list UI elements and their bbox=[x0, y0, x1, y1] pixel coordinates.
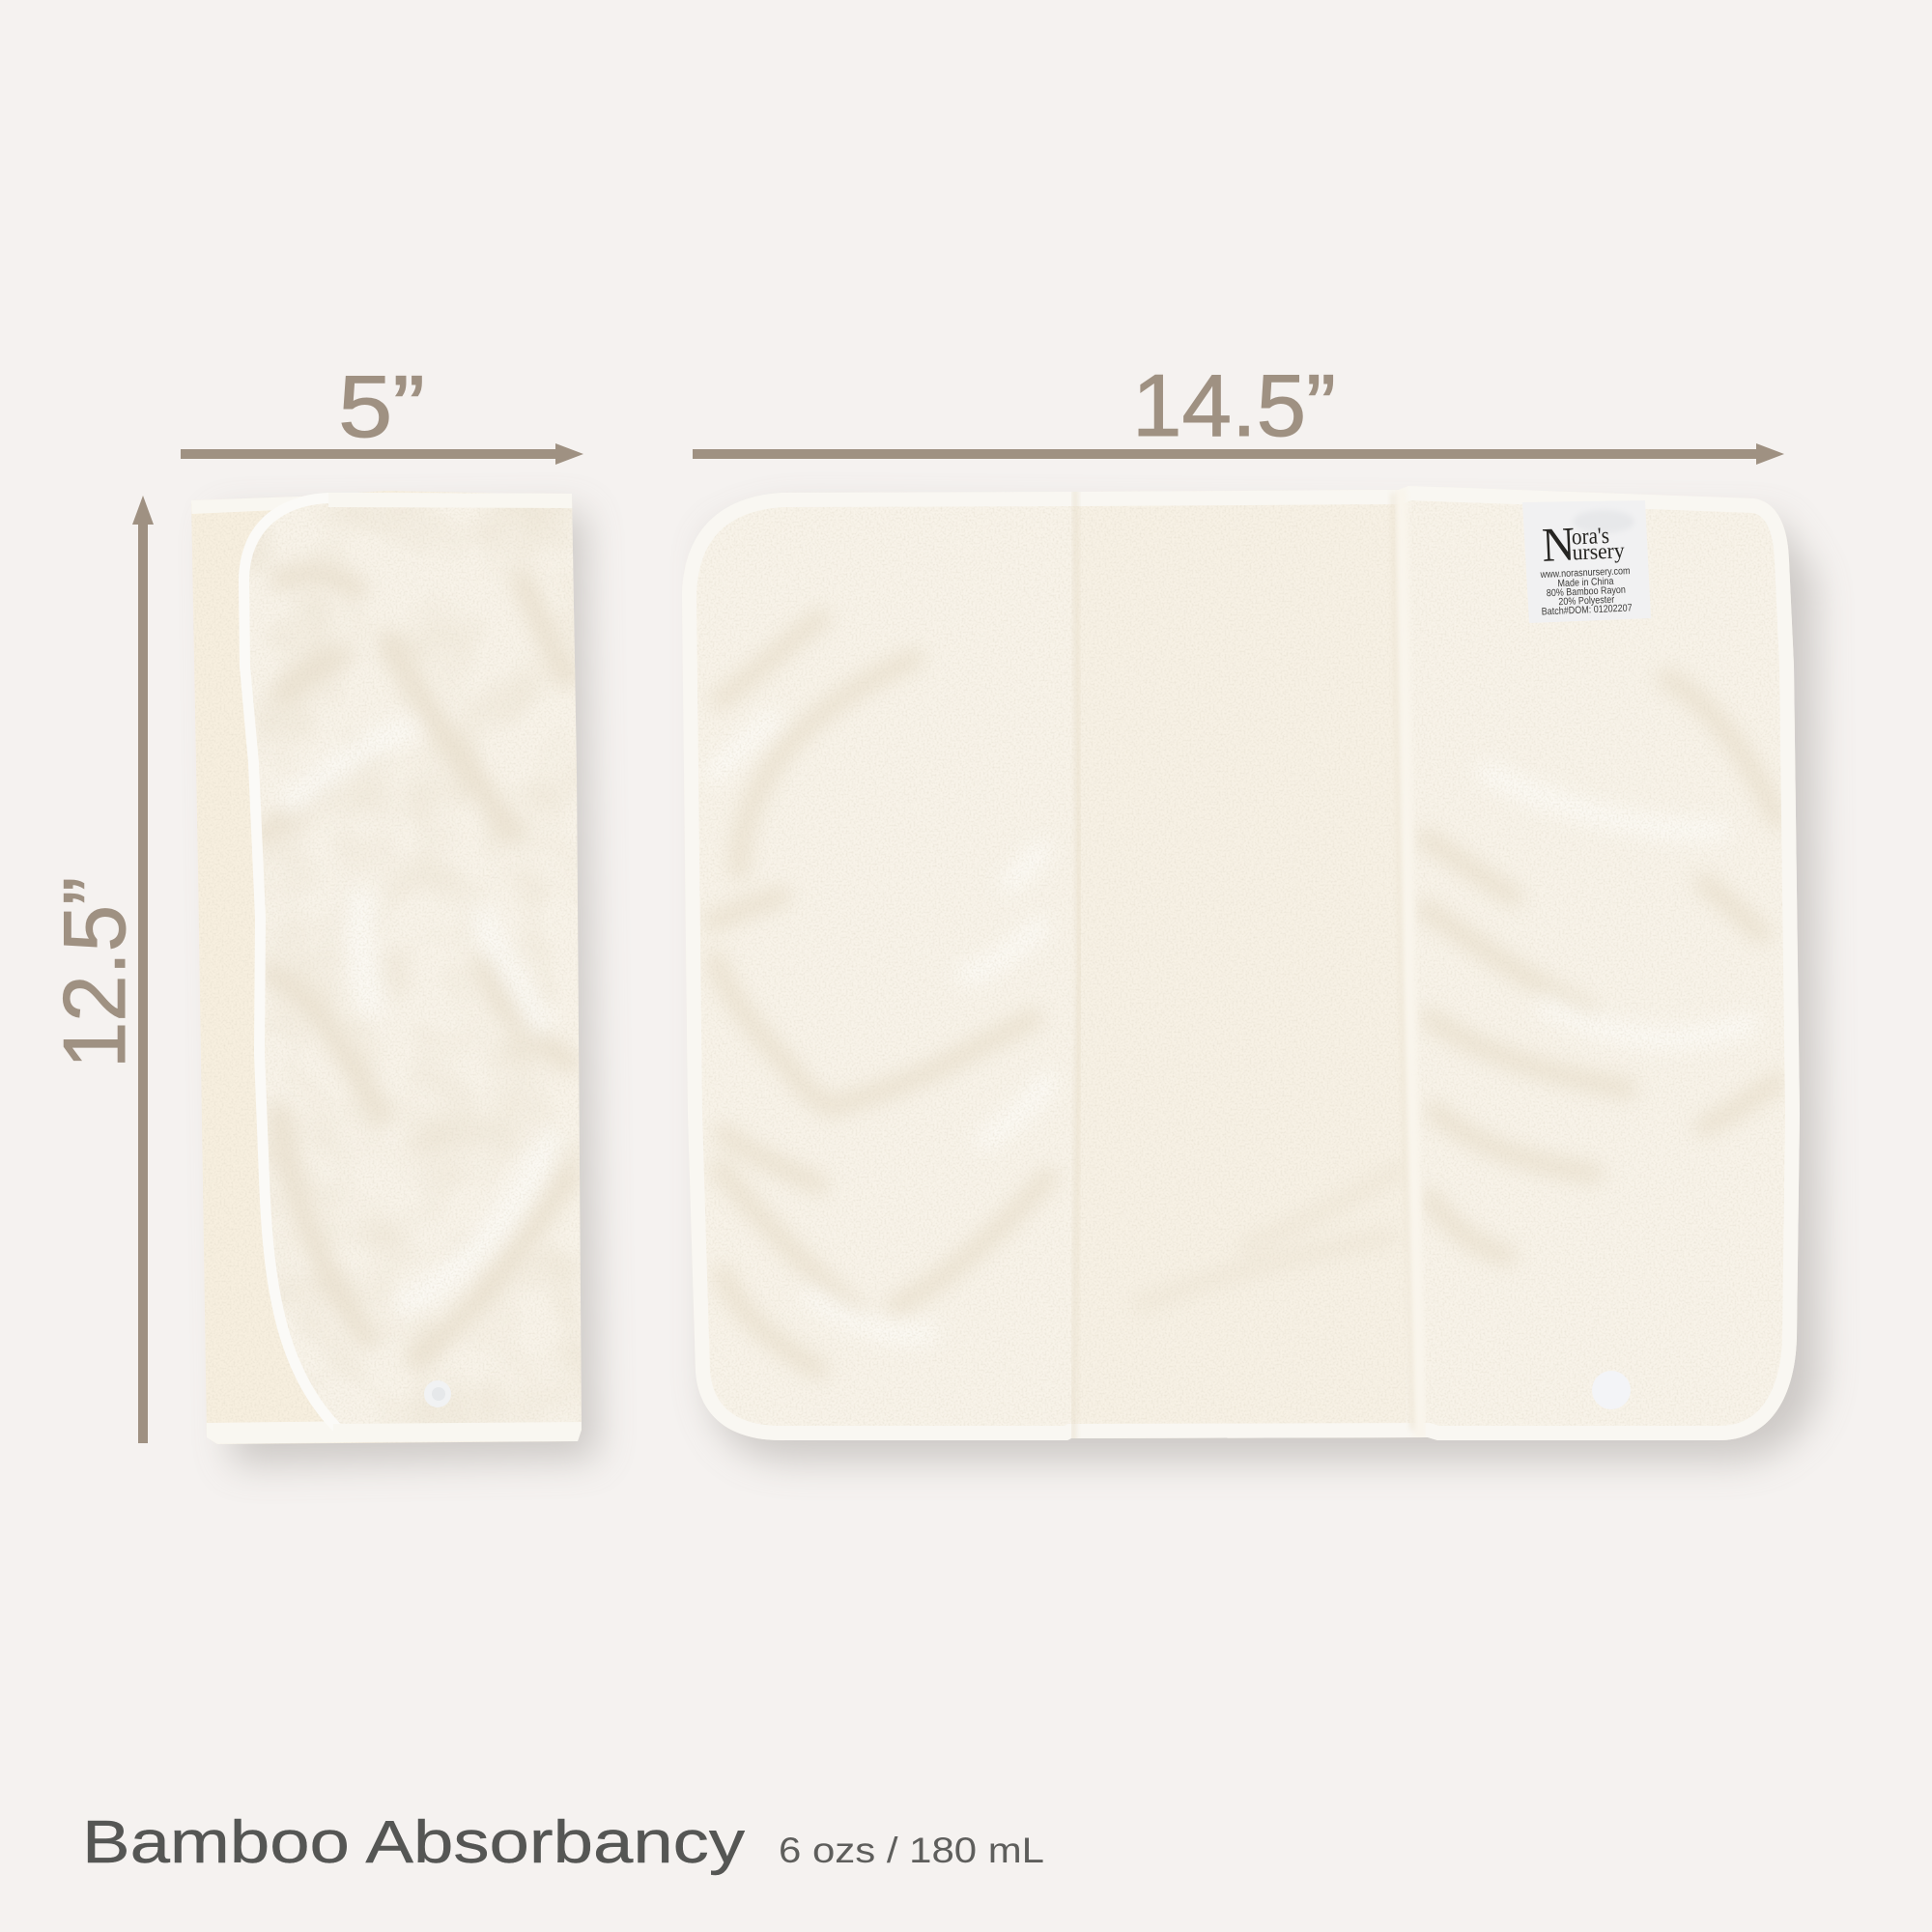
absorbency value: 6 ozs / 180 mL bbox=[779, 1831, 1044, 1870]
tag sheen bbox=[1573, 510, 1634, 533]
brand name bbox=[1541, 514, 1626, 572]
open insert fabric bbox=[676, 478, 1806, 1444]
open insert seams bbox=[1073, 488, 1420, 1444]
tag details: 20% Polyester bbox=[1558, 594, 1615, 608]
brand name: ora's bbox=[1571, 524, 1609, 551]
title: Bamboo Absorbancy bbox=[82, 1809, 745, 1876]
arrow: width of open insert bbox=[693, 443, 1784, 465]
dimension label: 14.5 inches: 14.5” bbox=[1132, 357, 1336, 455]
dimension label: 5 inches: 5” bbox=[338, 358, 425, 456]
brand name: N bbox=[1541, 516, 1576, 572]
tag details: Made in China bbox=[1557, 576, 1614, 589]
arrow: width of folded insert bbox=[181, 443, 583, 465]
shadow: folded insert bbox=[217, 512, 597, 1464]
folded insert front flap bbox=[232, 483, 589, 1449]
icon: snap on folded insert bbox=[424, 1380, 451, 1407]
product tag bbox=[1522, 500, 1651, 623]
tag details: Batch#DOM: 01202207 bbox=[1542, 602, 1633, 618]
arrow: height bbox=[132, 496, 154, 1443]
tag details: www.norasnursery.com bbox=[1539, 565, 1631, 581]
tag details bbox=[1539, 565, 1633, 618]
dimension label: 12.5 inches: 12.5” bbox=[46, 877, 144, 1068]
folded insert back layer bbox=[184, 483, 589, 1449]
panel: open insert bbox=[676, 478, 1806, 1444]
brand name: ursery bbox=[1572, 538, 1626, 565]
open insert binding bbox=[682, 486, 1800, 1440]
shadow: open insert bbox=[710, 512, 1820, 1461]
panel: folded insert bbox=[184, 483, 589, 1449]
tag details: 80% Bamboo Rayon bbox=[1547, 584, 1626, 599]
icon: snap on open insert bbox=[1592, 1371, 1631, 1409]
